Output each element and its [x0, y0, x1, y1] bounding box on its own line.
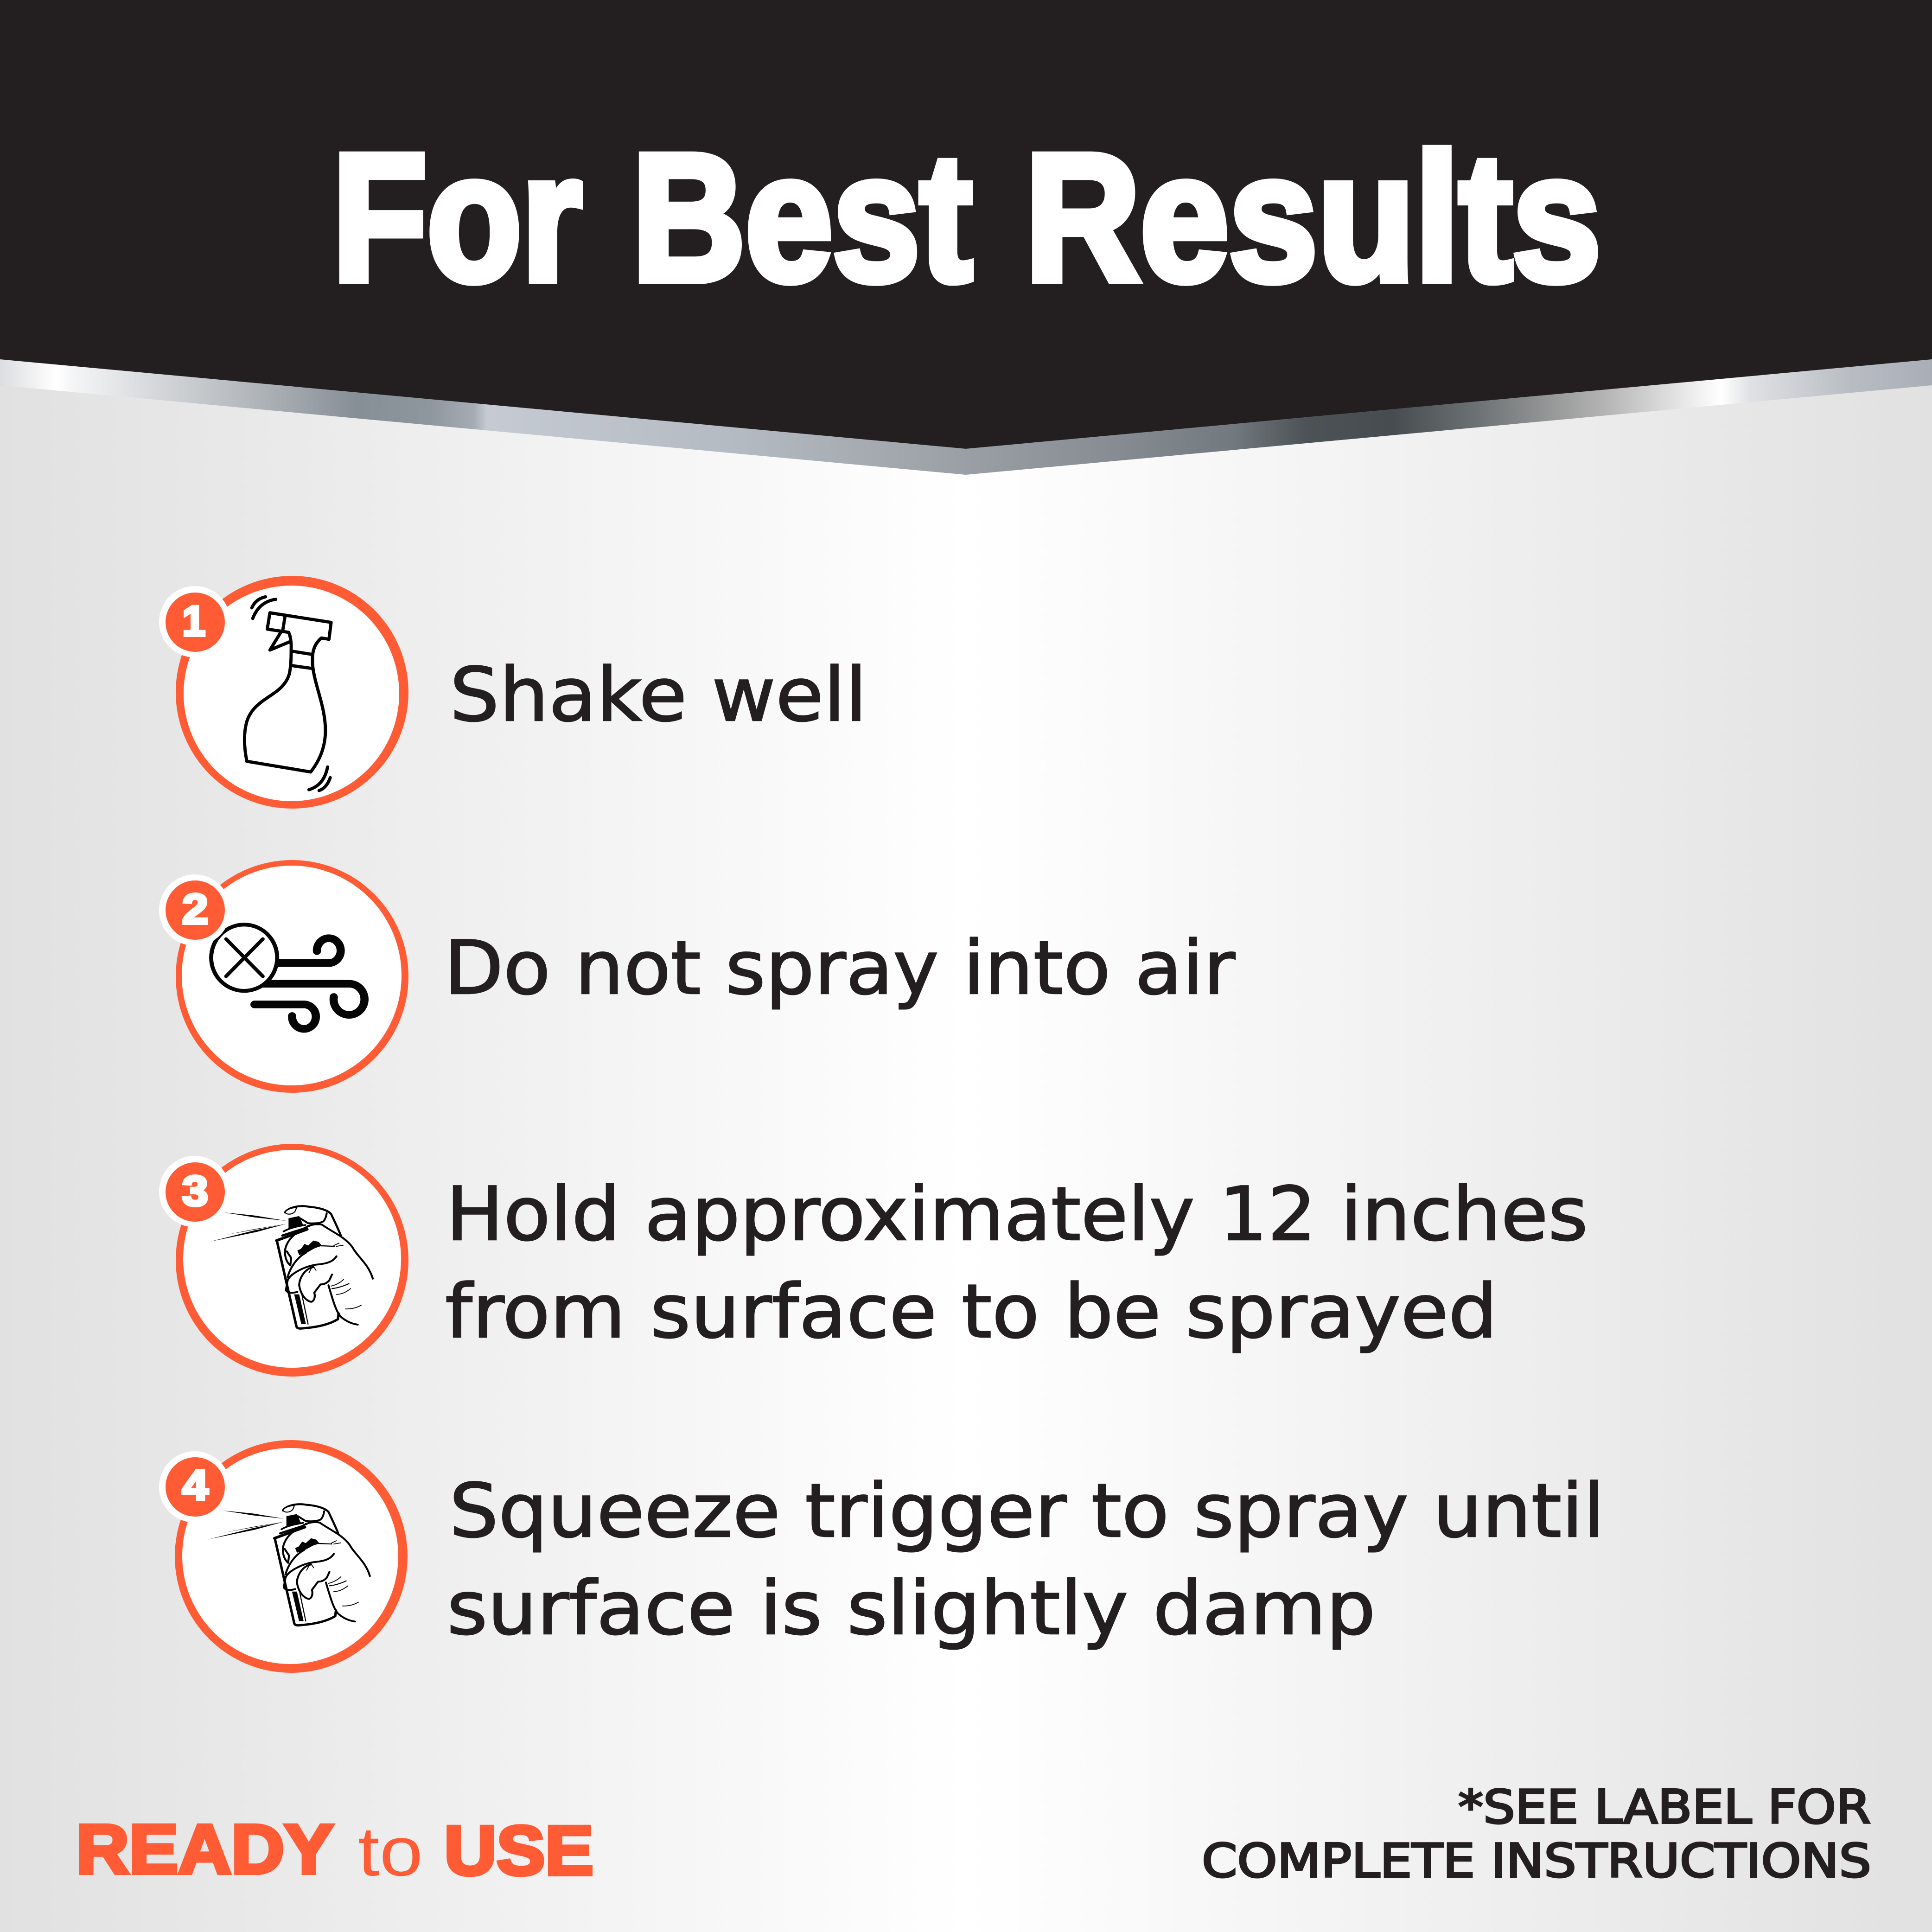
step 3 text: Hold approximately 12 inches [446, 1171, 1588, 1257]
footnote: COMPLETE INSTRUCTIONS [1202, 1834, 1871, 1888]
icon: hand holding spray can [210, 1206, 373, 1328]
icon ring 3 [176, 1144, 408, 1377]
icon ring 4 [175, 1440, 408, 1673]
number badge 3: 3 [182, 1167, 208, 1215]
icon ring 2 [176, 860, 408, 1093]
icon: no spraying into air [211, 925, 364, 1029]
ready to use tagline [76, 1810, 593, 1890]
metallic chevron band [0, 359, 1932, 475]
step 3 text, second line: from surface to be sprayed [445, 1268, 1498, 1355]
header banner [0, 0, 1932, 449]
panel: step 3 [159, 1144, 1588, 1377]
title: For [332, 116, 582, 319]
step 4 text, second line: surface is slightly damp [447, 1565, 1376, 1651]
title [332, 116, 1601, 319]
icon ring 1 [176, 576, 408, 809]
ready to use tagline: USE [444, 1811, 593, 1889]
number badge 4 [159, 1451, 230, 1523]
icon: hand squeezing spray can [209, 1504, 370, 1626]
footnote [1202, 1780, 1871, 1888]
panel: step 2 [159, 860, 1235, 1093]
number badge 2 [159, 874, 230, 946]
ready to use tagline: to [358, 1812, 423, 1890]
number badge 3 [159, 1156, 230, 1227]
number badge 2: 2 [182, 886, 208, 933]
footnote: *SEE LABEL FOR [1458, 1780, 1871, 1834]
panel: step 4 [159, 1440, 1605, 1673]
number badge 1: 1 [182, 598, 205, 645]
step 4 text: Squeeze trigger to spray until [449, 1467, 1605, 1554]
step 1 text: Shake well [450, 651, 867, 738]
title: Results [1025, 116, 1601, 319]
panel: step 1 [159, 576, 867, 809]
number badge 1 [159, 586, 230, 657]
ready to use tagline: READY [76, 1810, 333, 1888]
number badge 4: 4 [182, 1462, 208, 1509]
title: Best [632, 116, 972, 319]
step 2 text: Do not spray into air [444, 925, 1235, 1011]
icon: spray bottle shaking [244, 597, 331, 791]
